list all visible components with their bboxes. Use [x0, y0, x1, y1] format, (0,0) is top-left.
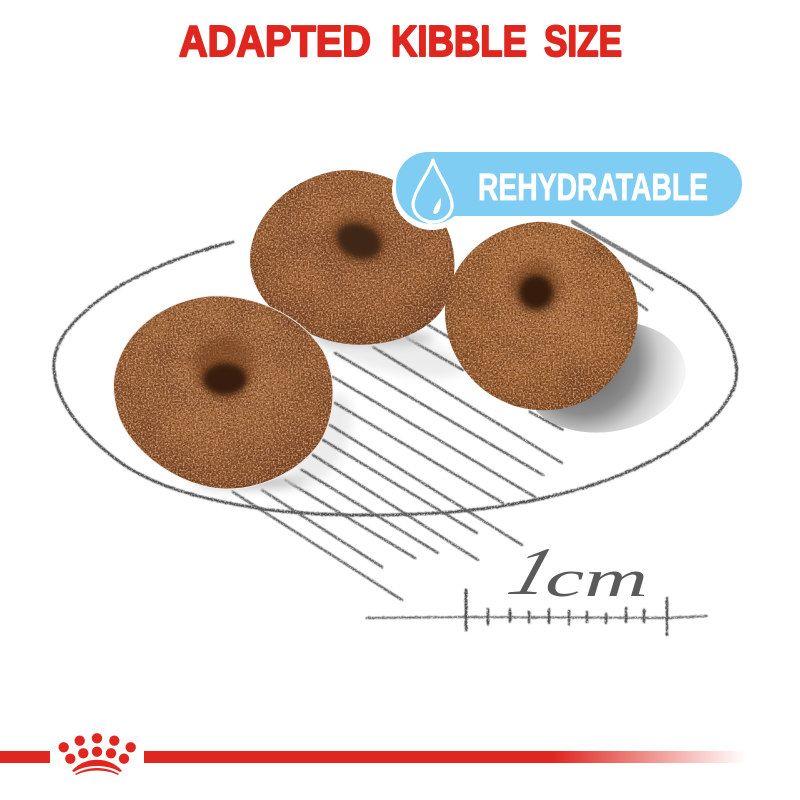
title: KIBBLE — [391, 17, 527, 66]
rehydratable badge — [392, 150, 742, 230]
soft shading on plate — [279, 311, 467, 495]
scale: handwritten 1cm — [500, 535, 648, 610]
kibble hole — [194, 336, 254, 396]
pencil hatching — [233, 222, 657, 600]
footer bar: right fading segment — [144, 751, 746, 763]
icon: water drop — [413, 160, 452, 222]
title: SIZE — [544, 17, 622, 66]
footer bar: left segment — [0, 751, 50, 763]
pencil plate outline — [54, 222, 737, 515]
badge label: REHYDRATABLE — [478, 167, 708, 209]
kibble 3 shadow — [517, 311, 693, 443]
kibble: right — [445, 222, 638, 410]
title — [179, 17, 622, 66]
kibble hole — [511, 261, 561, 313]
scale ruler — [366, 590, 707, 635]
icon: royal crown logo — [58, 733, 136, 775]
kibble hole — [321, 204, 395, 272]
title: ADAPTED — [179, 17, 371, 66]
kibble: front left — [114, 296, 332, 489]
kibble: back centre — [250, 170, 454, 345]
scale: handwritten 1cm: cm — [545, 551, 648, 608]
scale: handwritten 1cm: 1 — [500, 535, 564, 610]
